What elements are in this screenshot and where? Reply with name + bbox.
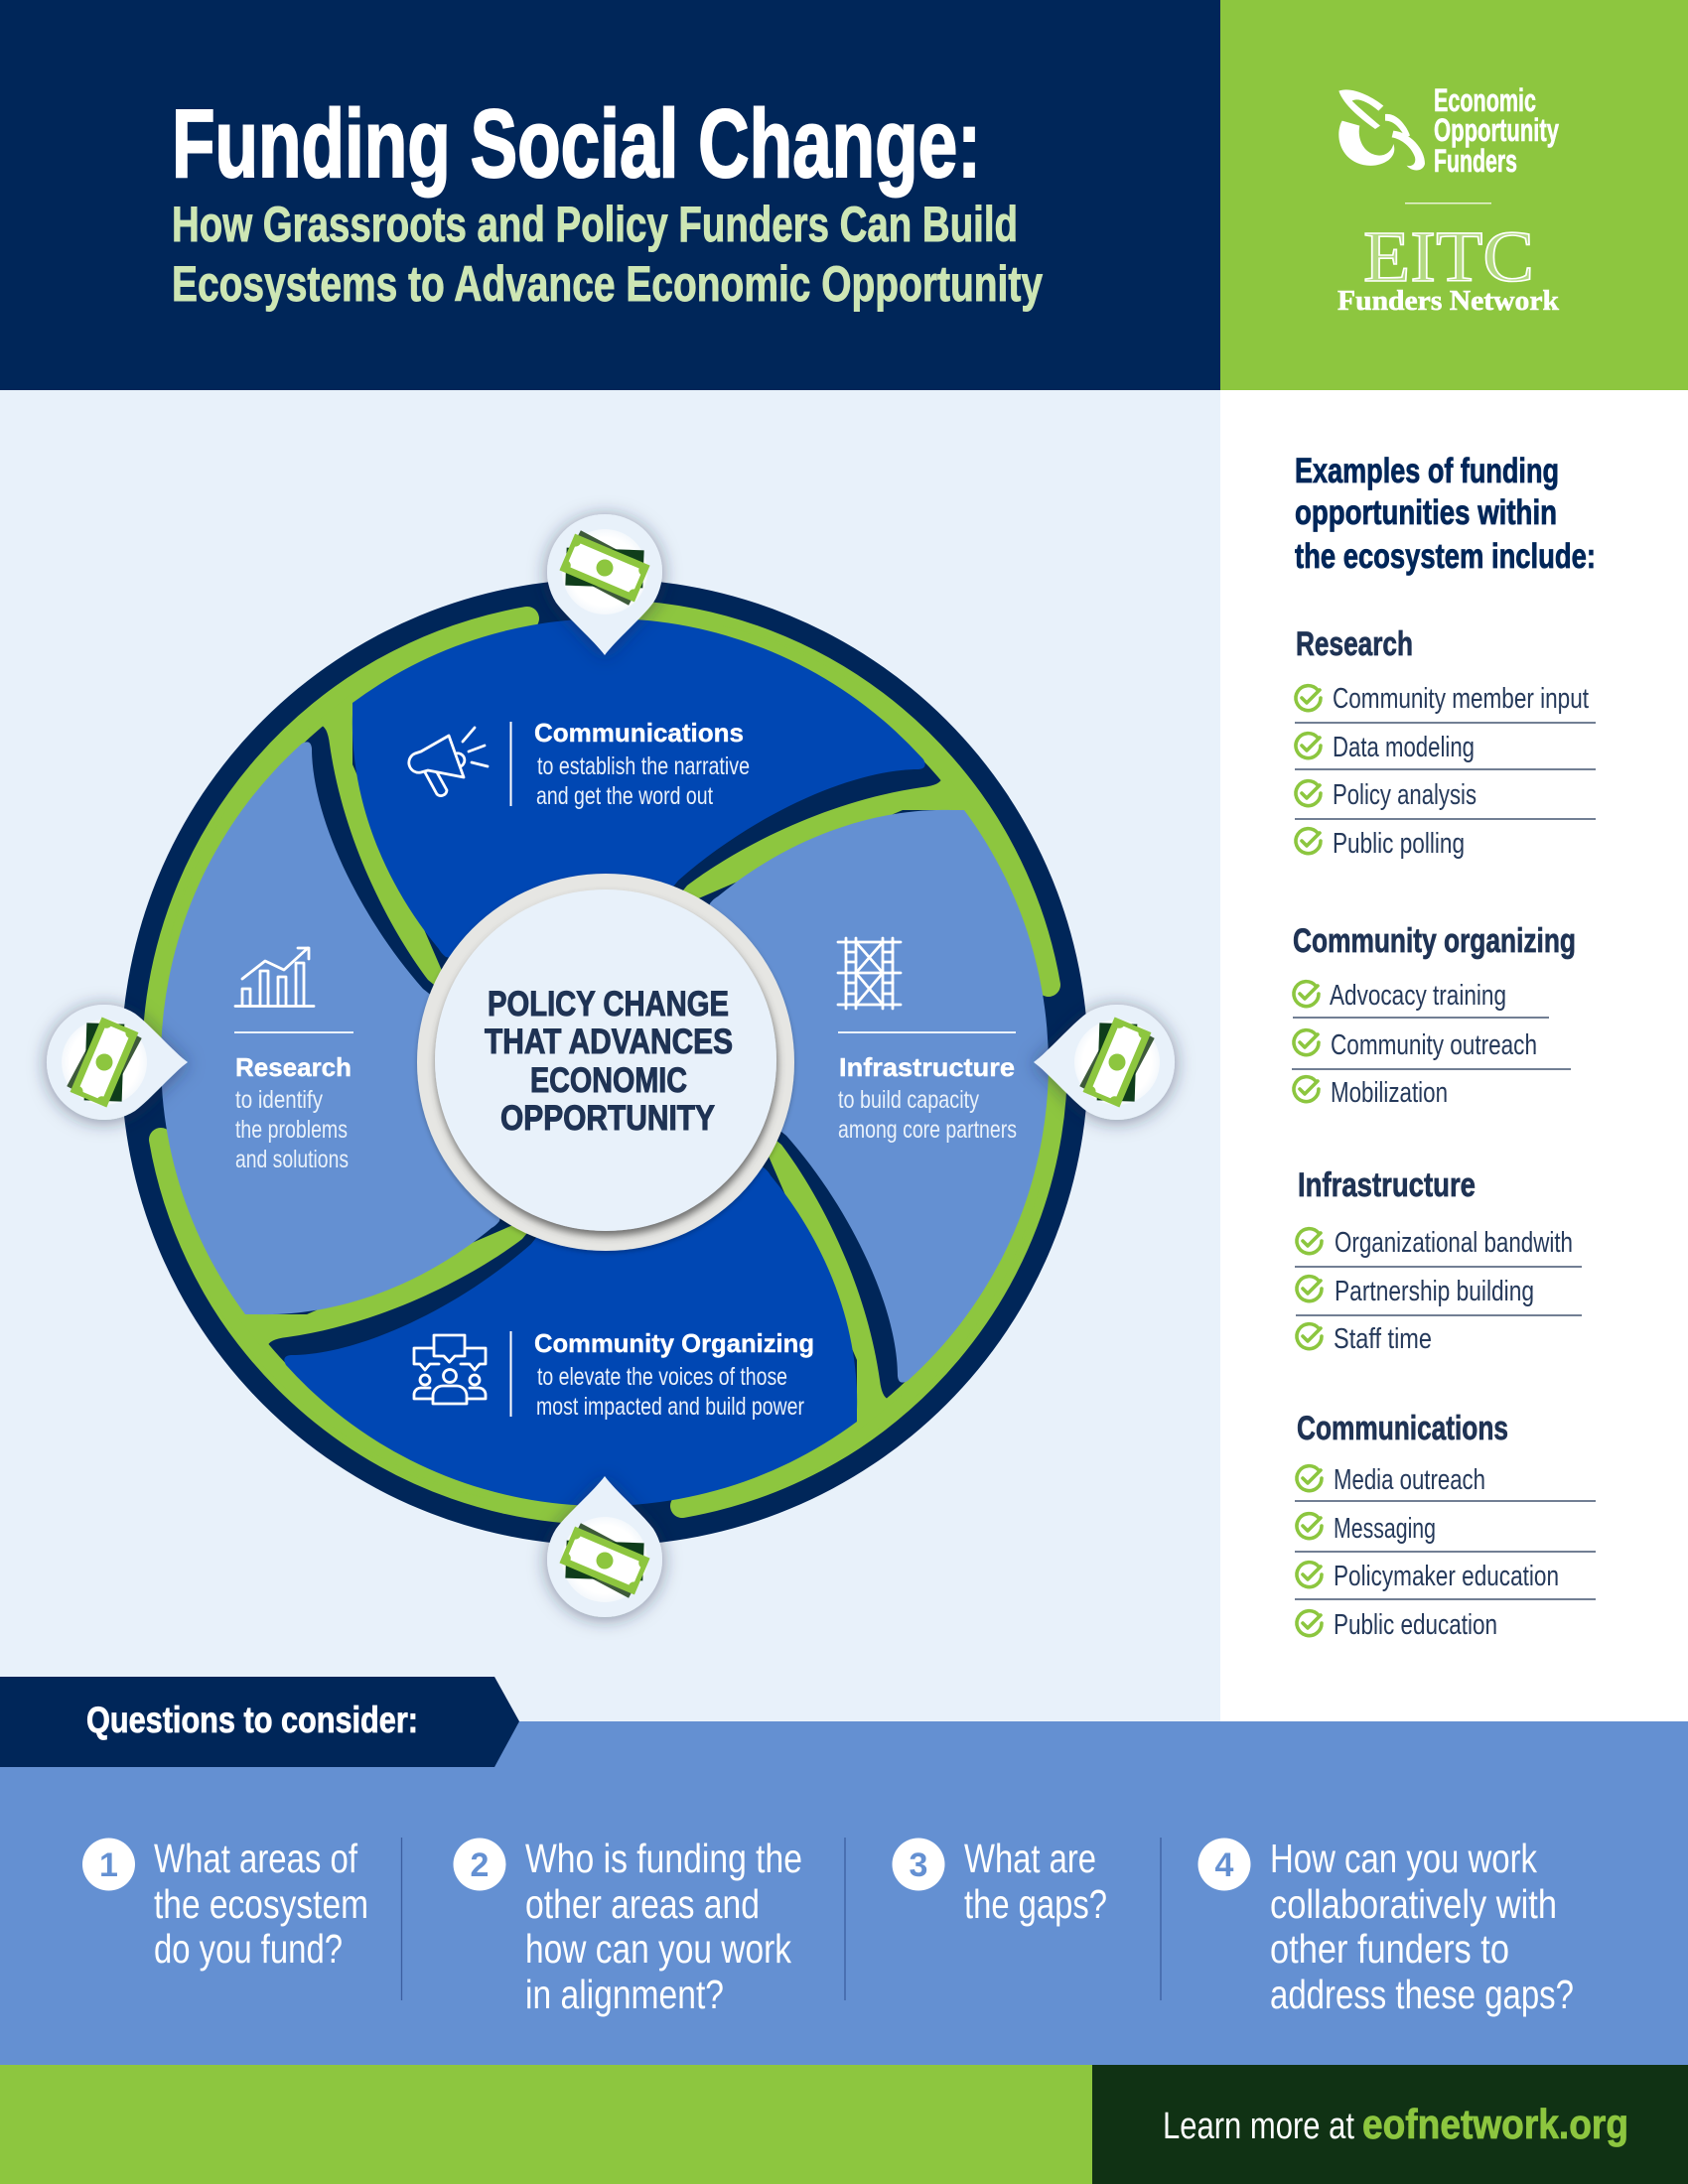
question 3: the gaps? [964, 1881, 1107, 1927]
question 3: What are [964, 1836, 1096, 1881]
centre text: ECONOMIC [530, 1061, 687, 1100]
subtitle: Ecosystems to Advance Economic Opportunity [172, 256, 1043, 312]
segment: community organizing [284, 1161, 857, 1506]
question 4: other funders to [1270, 1926, 1509, 1972]
list: communications: Policymaker education [1334, 1561, 1559, 1592]
logo name: Economic [1434, 82, 1536, 118]
icon: people with speech bubbles [414, 1335, 486, 1404]
question 1 [82, 1836, 368, 1972]
list: infrastructure [1295, 1166, 1582, 1355]
title: Funding Social Change: [172, 89, 981, 198]
footer link text: Learn more at [1163, 2106, 1354, 2147]
list: communications [1295, 1410, 1596, 1641]
logo name: Funders [1434, 143, 1517, 179]
infrastructure label: to build capacity [838, 1086, 979, 1114]
subtitle [172, 197, 1043, 312]
question 4 [1197, 1836, 1574, 2017]
page background panels [0, 390, 1688, 1721]
centre text: POLICY CHANGE [488, 985, 729, 1024]
question 2: 2 [471, 1846, 489, 1884]
segment: research [161, 742, 505, 1314]
list: research [1295, 625, 1596, 860]
footer [0, 2065, 1688, 2184]
list: community organizing: Community outreach [1331, 1029, 1537, 1061]
list: research: Community member input [1333, 683, 1589, 715]
icon: megaphone [409, 728, 488, 796]
ecosystem wheel [47, 514, 1175, 1617]
logo symbol [1338, 89, 1425, 170]
list: research: Research [1296, 625, 1413, 663]
list: research: Policy analysis [1333, 779, 1477, 811]
communications label [409, 718, 750, 810]
list: infrastructure: Organizational bandwith [1335, 1227, 1573, 1259]
pin: left money [47, 1005, 188, 1120]
communications label: and get the word out [536, 782, 713, 810]
list: community organizing: Community organizing [1293, 922, 1576, 960]
question 2 [453, 1836, 802, 2017]
EITC logo: EITC [1363, 216, 1534, 297]
list: infrastructure: Staff time [1334, 1323, 1432, 1355]
pin: bottom money [547, 1476, 662, 1617]
list: research: Data modeling [1333, 732, 1475, 763]
research label: to identify [235, 1086, 323, 1114]
centre circle [417, 874, 794, 1251]
logo panel [1220, 0, 1688, 390]
question 3 [892, 1836, 1107, 1927]
footer: eofnetwork.org [1362, 2101, 1628, 2147]
question 4: address these gaps? [1270, 1972, 1574, 2017]
list: research: Public polling [1333, 828, 1465, 860]
question 4: 4 [1215, 1846, 1234, 1884]
research label: Research [235, 1052, 352, 1082]
header band [0, 0, 1220, 390]
panel heading: the ecosystem include: [1295, 537, 1596, 576]
question 2: in alignment? [525, 1972, 724, 2017]
research label [234, 948, 353, 1173]
panel heading: opportunities within [1295, 493, 1557, 532]
question 1: do you fund? [154, 1926, 343, 1972]
list: community organizing: Advocacy training [1330, 980, 1506, 1012]
centre text [485, 985, 733, 1138]
logo name [1434, 82, 1559, 179]
panel heading [1295, 452, 1596, 576]
community organizing label: Community Organizing [534, 1328, 814, 1358]
question 1: 1 [99, 1846, 118, 1884]
list: communications: Media outreach [1334, 1464, 1485, 1496]
infrastructure label: Infrastructure [839, 1052, 1015, 1082]
community organizing label: to elevate the voices of those [537, 1363, 787, 1391]
logo name: Opportunity [1434, 112, 1559, 148]
research label: and solutions [235, 1146, 349, 1173]
panel heading: Examples of funding [1295, 452, 1559, 490]
list: communications: Public education [1334, 1609, 1497, 1641]
list: infrastructure: Partnership building [1335, 1276, 1534, 1307]
research label: the problems [235, 1116, 348, 1144]
panel: questions [0, 1677, 1688, 2065]
segment: communications [352, 618, 925, 963]
centre text: THAT ADVANCES [485, 1023, 733, 1061]
Funders Network: Funders Network [1337, 286, 1559, 317]
list: community organizing [1292, 922, 1576, 1109]
green swooshes [154, 612, 1055, 1513]
icon: scaffold [838, 938, 901, 1009]
communications label: Communications [534, 718, 744, 748]
question 4: How can you work [1270, 1836, 1537, 1881]
segment: infrastructure [704, 810, 1049, 1383]
centre text: OPPORTUNITY [500, 1099, 715, 1138]
question 2: how can you work [525, 1926, 791, 1972]
community organizing label [414, 1328, 814, 1421]
pin: top money [547, 514, 662, 655]
subtitle: How Grassroots and Policy Funders Can Build [172, 197, 1018, 252]
banner: questions to consider: Questions to consider: [86, 1700, 418, 1740]
question 1: the ecosystem [154, 1881, 368, 1927]
list: communications: Communications [1297, 1410, 1508, 1447]
community organizing label: most impacted and build power [536, 1393, 804, 1421]
infrastructure label: among core partners [838, 1116, 1017, 1144]
pin: right money [1034, 1005, 1175, 1120]
list: communications: Messaging [1334, 1513, 1436, 1545]
question 1: What areas of [154, 1836, 357, 1881]
infrastructure label [838, 938, 1017, 1144]
question 2: other areas and [525, 1881, 760, 1927]
outer navy disc [121, 579, 1088, 1546]
icon: chart [235, 948, 314, 1007]
question 3: 3 [910, 1846, 927, 1884]
banner: questions to consider [0, 1677, 519, 1767]
list: infrastructure: Infrastructure [1298, 1166, 1476, 1204]
communications label: to establish the narrative [537, 752, 750, 780]
list: community organizing: Mobilization [1331, 1077, 1448, 1109]
question 2: Who is funding the [525, 1836, 802, 1881]
panel: funding examples [1292, 452, 1596, 1641]
question 4: collaboratively with [1270, 1881, 1557, 1927]
